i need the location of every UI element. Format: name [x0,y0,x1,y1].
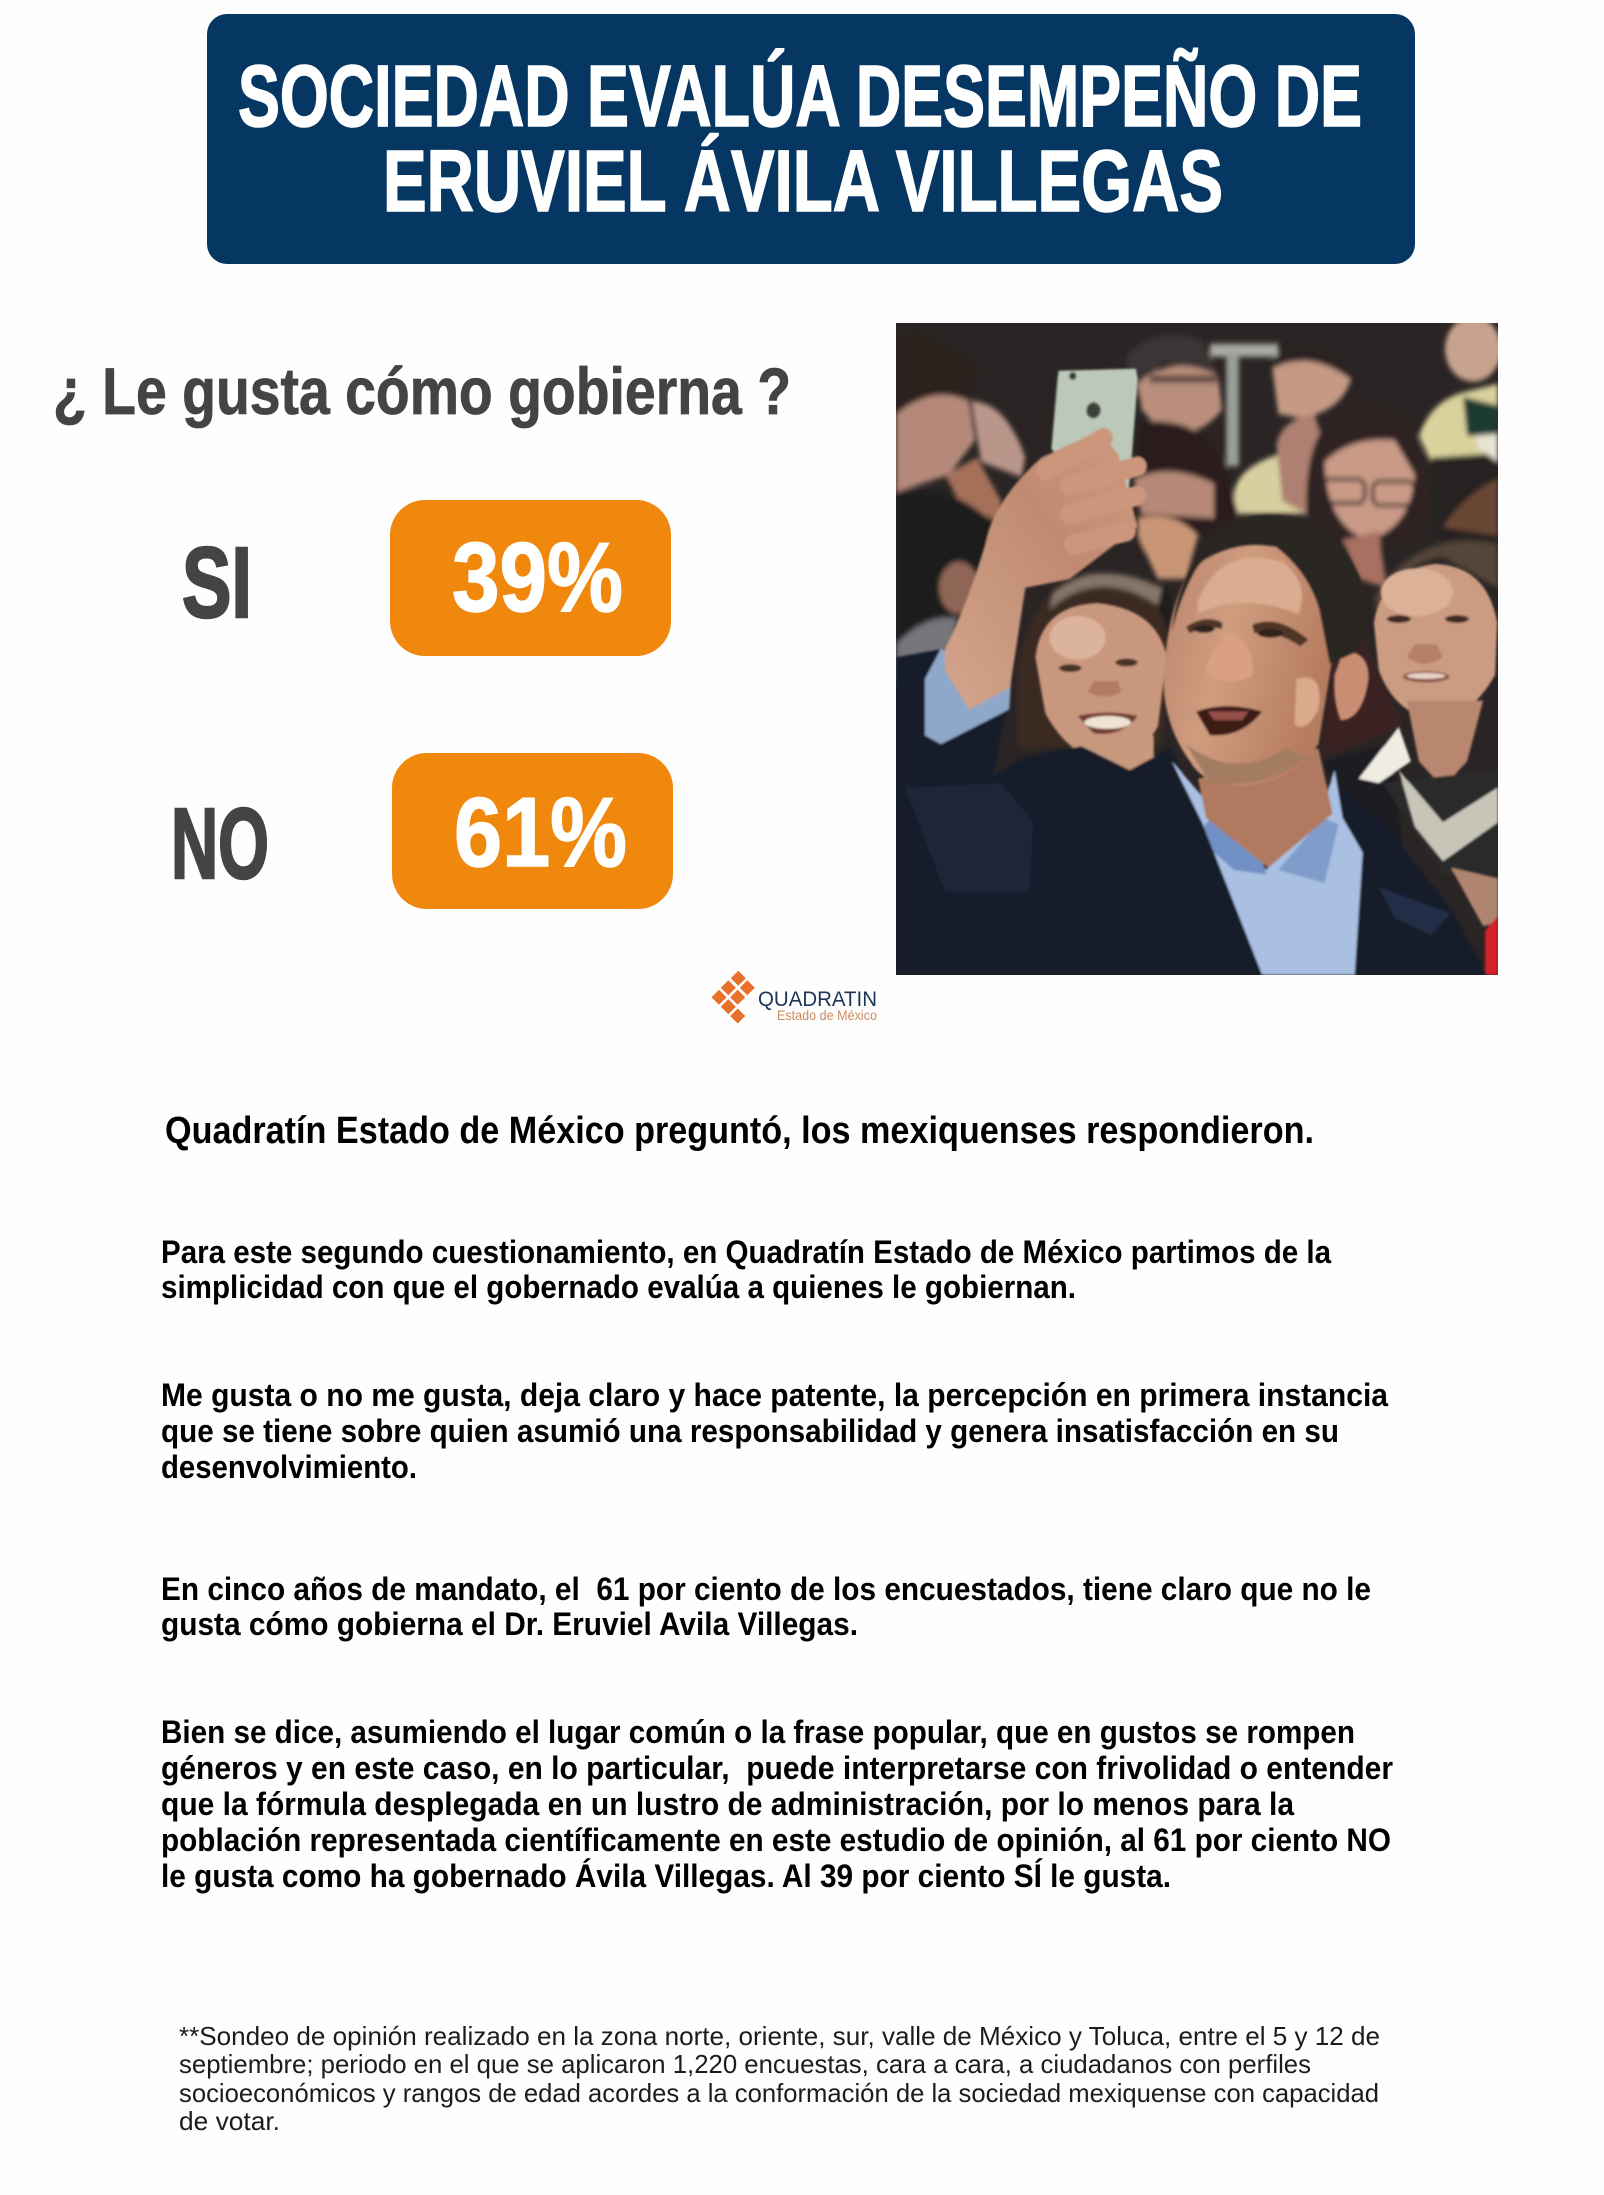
footnote: de votar. [179,2106,280,2136]
paragraph 3: gusta cómo gobierna el Dr. Eruviel Avila Villegas. [161,1606,858,1642]
paragraph 3 [161,1571,1371,1642]
paragraph 4: géneros y en este caso, en lo particular, puede interpretarse con frivolidad o entender [161,1750,1393,1786]
paragraph 1 [161,1234,1331,1305]
paragraph 2: desenvolvimiento. [161,1449,417,1485]
result box: 61% [392,753,673,909]
photo: governor taking a selfie with students [896,323,1498,975]
footnote: **Sondeo de opinión realizado en la zona norte, oriente, sur, valle de México y Toluca, entre el 5 y 12 de [179,2021,1380,2051]
footnote: septiembre; periodo en el que se aplicaron 1,220 encuestas, cara a cara, a ciudadanos con perfiles [179,2049,1311,2079]
title banner: ERUVIEL ÁVILA VILLEGAS [383,133,1223,230]
paragraph 4: que la fórmula desplegada en un lustro de administración, por lo menos para la [161,1786,1294,1822]
footnote: socioeconómicos y rangos de edad acordes a la conformación de la sociedad mexiquense con capacidad [179,2078,1379,2108]
label: SI: SI [182,527,252,639]
result box: 39%: 39% [452,522,623,632]
paragraph 1: Para este segundo cuestionamiento, en Quadratín Estado de México partimos de la [161,1234,1331,1270]
paragraph 4: población representada científicamente en este estudio de opinión, al 61 por ciento NO [161,1822,1391,1858]
paragraph 2: que se tiene sobre quien asumió una responsabilidad y genera insatisfacción en su [161,1413,1339,1449]
paragraph 2: Me gusta o no me gusta, deja claro y hace patente, la percepción en primera instancia [161,1377,1388,1413]
paragraph 4: Bien se dice, asumiendo el lugar común o la frase popular, que en gustos se rompen [161,1714,1355,1750]
logo: Quadratin Estado de México: QUADRATIN [758,988,877,1011]
logo: Quadratin Estado de México: Estado de México [777,1008,877,1023]
logo: Quadratin Estado de México [712,971,877,1024]
question heading: ¿ Le gusta cómo gobierna ? [53,354,791,428]
subheading: Quadratín Estado de México preguntó, los mexiquenses respondieron. [165,1110,1314,1152]
result box: 39% [390,500,671,656]
title banner [207,14,1415,264]
paragraph 4 [161,1714,1393,1894]
result box: 61%: 61% [454,777,627,887]
paragraph 2 [161,1377,1388,1485]
label: NO: NO [171,788,269,900]
paragraph 4: le gusta como ha gobernado Ávila Villegas. Al 39 por ciento SÍ le gusta. [161,1858,1171,1894]
icon: orange diamond mosaic [712,971,755,1024]
paragraph 1: simplicidad con que el gobernado evalúa a quienes le gobiernan. [161,1269,1076,1305]
paragraph 3: En cinco años de mandato, el 61 por ciento de los encuestados, tiene claro que no le [161,1571,1371,1607]
footnote [179,2021,1380,2136]
